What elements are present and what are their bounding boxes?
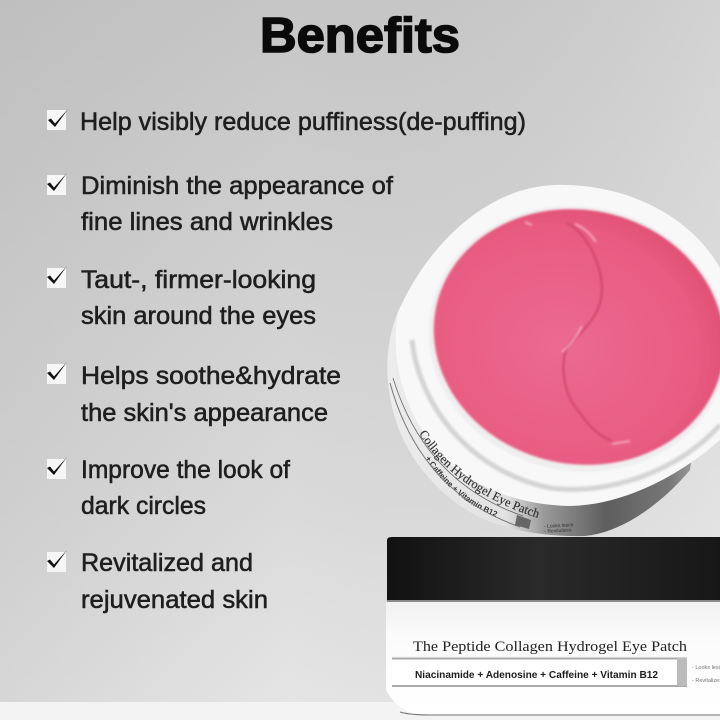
title: Benefits	[260, 9, 460, 63]
benefit 5 text: dark circles	[81, 492, 206, 520]
benefit 4 text: the skin's appearance	[81, 399, 328, 427]
benefit 3 text	[81, 266, 316, 330]
jar side fine print: - Looks lesch	[544, 522, 574, 530]
benefit 4 text: Helps soothe&hydrate	[81, 362, 341, 390]
benefit 1	[47, 108, 526, 136]
benefit 6 text	[81, 549, 268, 614]
lid	[387, 537, 720, 600]
patch divider curve	[563, 223, 612, 441]
jar white base	[386, 602, 720, 714]
benefit 6 text: rejuvenated skin	[81, 586, 268, 614]
benefit 3 text: Taut-, firmer-looking	[81, 266, 316, 294]
icon: check 2	[47, 173, 67, 195]
rim inner bands	[412, 340, 720, 489]
closed jar base	[386, 537, 720, 715]
benefit 6	[47, 549, 268, 614]
floor	[0, 702, 720, 720]
product name: The Peptide Collagen Hydrogel Eye Patch	[413, 639, 688, 655]
benefit 5 text	[81, 456, 290, 520]
tilted jar label: Collagen Hydrogel Eye Patch	[420, 430, 539, 518]
icon: check 3	[47, 266, 67, 288]
side notes	[692, 665, 720, 684]
ingredient box	[392, 658, 686, 686]
benefit 2 text: Diminish the appearance of	[81, 172, 393, 200]
lid bottom edge	[387, 600, 720, 602]
benefit 1 text: Help visibly reduce puffiness(de-puffing)	[80, 108, 526, 136]
rim inner shading	[404, 179, 720, 499]
benefit 4	[47, 362, 341, 427]
benefit 6 text: Revitalized and	[81, 549, 253, 577]
pink hydrogel patches	[410, 182, 720, 492]
ingredients: Niacinamide + Adenosine + Caffeine + Vitamin B12	[415, 669, 658, 681]
jar rim	[396, 185, 720, 506]
benefit 2	[47, 172, 393, 236]
tilted jar label	[390, 378, 539, 529]
benefit 4 text	[81, 362, 341, 427]
benefit 3 text: skin around the eyes	[81, 302, 316, 330]
open jar with pink patches	[387, 184, 720, 536]
jar body	[387, 312, 700, 536]
benefit 3	[47, 266, 316, 330]
icon: check 4	[47, 362, 67, 384]
icon: check 5	[47, 457, 67, 479]
tilted jar label: + Caffeine + Vitamin B12	[426, 456, 498, 516]
icon: check 6	[47, 550, 67, 572]
jar base shadow	[400, 712, 720, 715]
jar side fine print	[544, 522, 574, 535]
jar side fine print: - Revitalizes	[544, 527, 572, 535]
benefit 2 text	[81, 172, 393, 236]
benefit 5 text: Improve the look of	[81, 456, 290, 484]
patch highlight	[525, 222, 630, 444]
ingredient box side	[677, 658, 687, 686]
icon: check 1	[47, 109, 68, 130]
benefit 5	[47, 456, 290, 520]
benefit 2 text: fine lines and wrinkles	[81, 208, 333, 236]
